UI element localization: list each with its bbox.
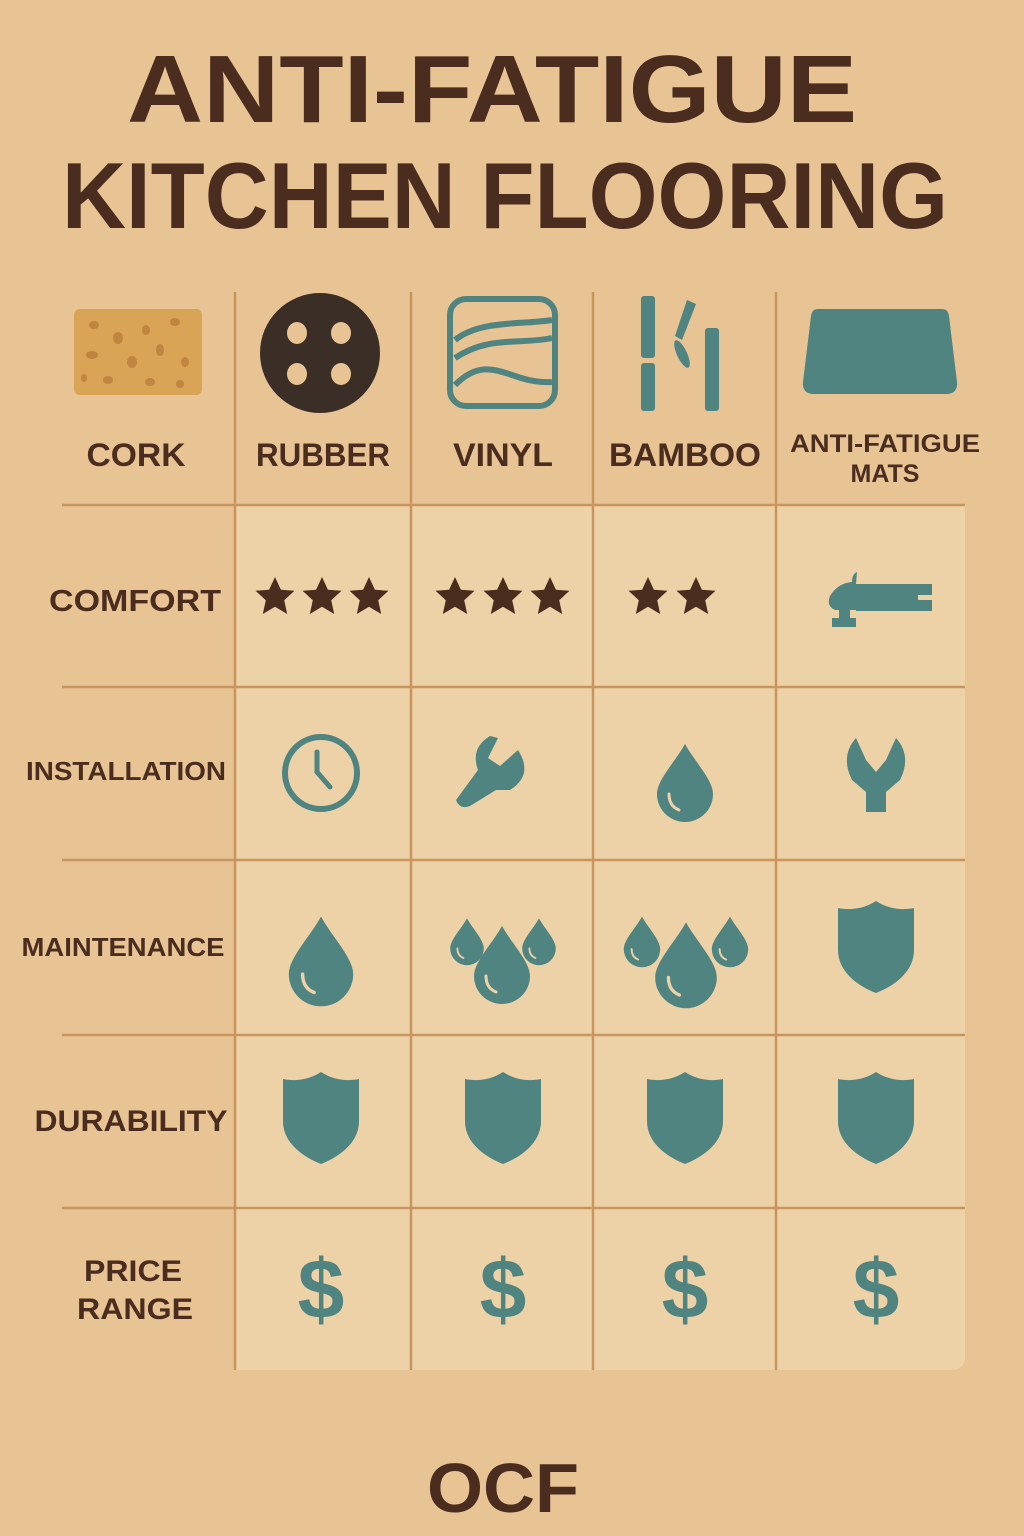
price row — [298, 1242, 899, 1336]
row labels: INSTALLATION — [26, 756, 226, 786]
column headers: ANTI-FATIGUE — [790, 430, 980, 458]
icon: hammer — [829, 572, 932, 627]
table body background — [235, 505, 965, 1370]
grid lines — [62, 292, 965, 1370]
icon: mat — [803, 309, 957, 394]
footer: OCF: OCF — [427, 1449, 579, 1527]
price row: $ — [662, 1242, 708, 1336]
column headers: RUBBER — [256, 437, 390, 473]
icon: bamboo — [641, 296, 719, 411]
title — [62, 36, 948, 248]
row labels: RANGE — [77, 1293, 193, 1326]
price row: $ — [853, 1242, 899, 1336]
durability row — [283, 1072, 914, 1164]
title: ANTI-FATIGUE — [127, 36, 857, 143]
row labels: DURABILITY — [34, 1105, 228, 1138]
row labels — [22, 583, 228, 1326]
icon: cork — [74, 309, 202, 395]
price row: $ — [480, 1242, 526, 1336]
comfort row — [256, 572, 932, 627]
column headers: VINYL — [453, 437, 553, 473]
row labels: MAINTENANCE — [22, 932, 224, 962]
installation row — [285, 736, 905, 822]
row labels: COMFORT — [49, 583, 221, 618]
title: KITCHEN FLOORING — [62, 143, 948, 248]
icon: vinyl — [450, 299, 555, 406]
column headers: MATS — [851, 460, 919, 488]
header icons — [74, 293, 957, 413]
price row: $ — [298, 1242, 344, 1336]
column headers — [86, 430, 980, 488]
maintenance row — [289, 901, 914, 1008]
column headers: CORK — [86, 437, 186, 473]
column headers: BAMBOO — [609, 437, 761, 473]
icon: rubber — [260, 293, 380, 413]
row labels: PRICE — [84, 1255, 182, 1288]
